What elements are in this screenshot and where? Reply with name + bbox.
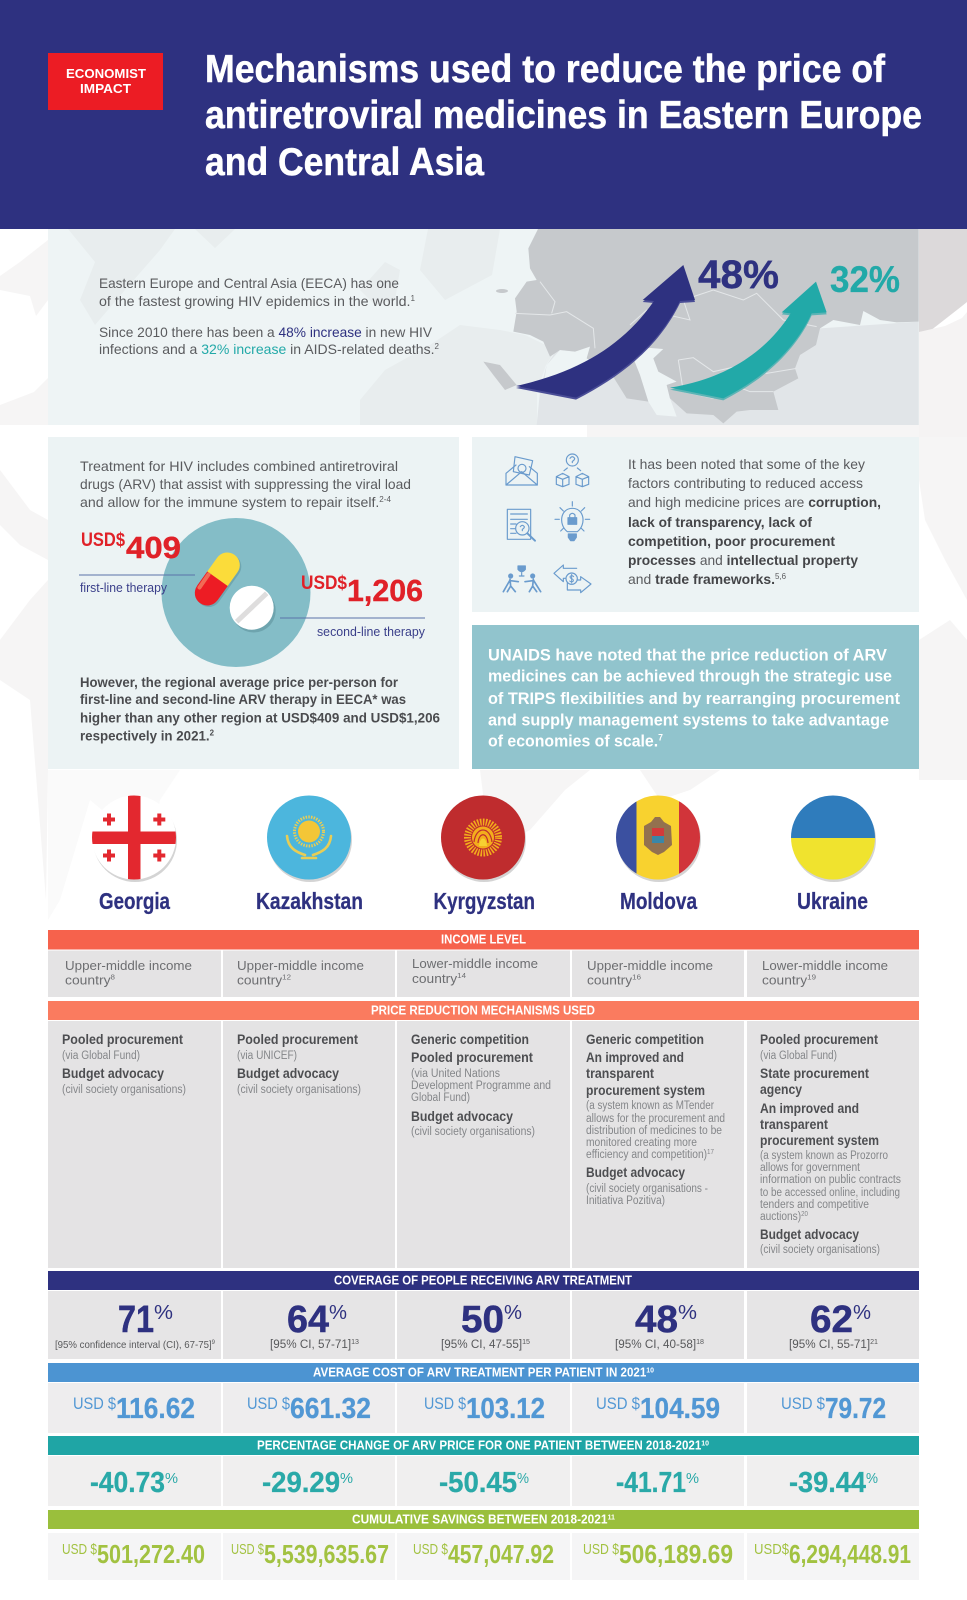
- cost values: 104.59: [640, 1393, 720, 1425]
- icon: price exchange arrows: [554, 565, 591, 593]
- coverage values: %: [504, 1302, 522, 1324]
- mechanisms: Kazakhstan: Pooled procurement: [237, 1032, 358, 1047]
- treatment text: [80, 458, 411, 510]
- confidence intervals: 21: [870, 1339, 878, 1346]
- regional price text: respectively in 2021.: [80, 728, 211, 744]
- logo: Economist Impact: ECONOMIST: [66, 66, 146, 81]
- intro text: infections and a 32% increase in AIDS-related deaths.: [99, 341, 434, 357]
- savings values: USD $: [62, 1541, 98, 1558]
- treatment text: 2-4: [379, 495, 392, 504]
- intro text: of the fastest growing HIV epidemics in the world.: [99, 293, 406, 309]
- coverage values: 64: [287, 1299, 329, 1341]
- panel: UNAIDS callout: medicines can be achieved through the strategic use: [488, 668, 892, 686]
- key factors text: and trade frameworks.: [628, 571, 776, 587]
- mechanisms: Kazakhstan: [237, 1032, 361, 1096]
- title: Mechanisms used to reduce the price of: [205, 48, 886, 91]
- price: first-line therapy: [79, 530, 195, 595]
- mechanisms: Kyrgyzstan: (civil society organisations): [411, 1126, 535, 1138]
- section: ARV treatment coverage: [48, 1271, 919, 1359]
- mechanisms: Ukraine: (via Global Fund): [760, 1050, 837, 1062]
- mechanisms: Ukraine: State procurement: [760, 1066, 869, 1081]
- section: price reduction mechanisms: PRICE REDUCTION MECHANISMS USED: [371, 1004, 595, 1018]
- header band: [0, 0, 967, 229]
- mechanisms: Ukraine: agency: [760, 1082, 802, 1097]
- mechanisms: Moldova: Initiativa Pozitiva): [586, 1195, 665, 1207]
- icon: two people with trophy: [503, 566, 541, 592]
- section: percentage change: PERCENTAGE CHANGE OF ARV PRICE FOR ONE PATIENT BETWEEN 2018-2021: [257, 1438, 737, 1452]
- icon: lightbulb with padlock: [555, 502, 590, 541]
- percentage values: -50.45: [439, 1467, 517, 1499]
- cost values: 79.72: [825, 1393, 886, 1425]
- treatment text: Treatment for HIV includes combined antiretroviral: [80, 458, 398, 474]
- key factors text: factors contributing to reduced access: [628, 475, 863, 491]
- section: percentage change: 10: [701, 1438, 709, 1448]
- mechanisms: Kazakhstan: Budget advocacy: [237, 1066, 339, 1081]
- mechanisms: Georgia: [62, 1032, 186, 1096]
- coverage values: 71: [118, 1299, 154, 1341]
- confidence intervals: [95% CI, 57-71]: [270, 1339, 350, 1351]
- regional price text: first-line and second-line ARV therapy in EECA* was: [80, 692, 406, 707]
- coverage values: %: [853, 1302, 871, 1324]
- logo: Economist Impact: IMPACT: [80, 81, 131, 96]
- price: second-line therapy: second-line therapy: [317, 625, 426, 639]
- flag: Ukraine: [791, 795, 876, 882]
- mechanisms: Ukraine: transparent: [760, 1117, 828, 1132]
- mechanisms: Moldova: Generic competition: [586, 1032, 704, 1047]
- mechanisms: Kyrgyzstan: Development Programme and: [411, 1080, 551, 1092]
- section: price reduction mechanisms: [48, 1001, 919, 1268]
- mechanisms: Georgia: Pooled procurement: [62, 1032, 183, 1047]
- coverage values: 48: [635, 1299, 678, 1341]
- icon: envelope with money: [506, 457, 537, 485]
- section: average cost: [48, 1363, 919, 1433]
- flag: Georgia: [92, 795, 177, 882]
- pills illustration: [162, 518, 310, 667]
- mechanisms: Georgia: (via Global Fund): [62, 1050, 140, 1062]
- confidence intervals: 15: [522, 1339, 530, 1346]
- mechanisms: Ukraine: allows for government: [760, 1162, 861, 1174]
- price: first-line therapy: USD$: [81, 530, 125, 551]
- mechanisms: Georgia: Budget advocacy: [62, 1066, 164, 1081]
- panel: key factors: [472, 437, 919, 612]
- key factors text: lack of transparency, lack of: [628, 514, 812, 530]
- section: income level: Lower-middle income: [762, 958, 888, 973]
- arrow: 32% increase: [670, 282, 827, 400]
- savings values: 5,539,635.67: [264, 1539, 389, 1569]
- mechanisms: Georgia: (civil society organisations): [62, 1084, 186, 1096]
- panel: UNAIDS callout: [472, 625, 919, 769]
- savings values: USD$: [754, 1541, 790, 1558]
- section: income level: INCOME LEVEL: [441, 932, 526, 946]
- mechanisms: Ukraine: (civil society organisations): [760, 1244, 880, 1256]
- cost values: 661.32: [290, 1393, 371, 1425]
- percentage values: %: [866, 1470, 878, 1487]
- section: cumulative savings: 11: [607, 1512, 615, 1522]
- cost values: USD $: [781, 1394, 825, 1413]
- mechanisms: Moldova: allows for the procurement and: [586, 1113, 725, 1125]
- flag: Kazakhstan: [267, 796, 352, 882]
- confidence intervals: [95% CI, 55-71]: [789, 1339, 869, 1351]
- intro text: Since 2010 there has been a 48% increase in new HIV: [99, 324, 433, 340]
- section: income level: Upper-middle income: [587, 958, 713, 973]
- section: income level: Upper-middle income: [237, 958, 364, 973]
- mechanisms: Moldova: (a system known as MTender: [586, 1100, 714, 1112]
- percentage values: %: [517, 1470, 529, 1487]
- regional price text: However, the regional average price per-person for: [80, 675, 399, 690]
- key factors text: competition, poor procurement: [628, 533, 835, 549]
- country names: Georgia: [99, 888, 170, 914]
- mechanisms: Kazakhstan: (civil society organisations): [237, 1084, 361, 1096]
- mechanisms: Ukraine: information on public contracts: [760, 1174, 901, 1186]
- section: income level: 8: [111, 972, 115, 982]
- savings values: 506,189.69: [619, 1539, 733, 1569]
- mechanisms: Moldova: distribution of medicines to be: [586, 1125, 722, 1137]
- section: cumulative savings: CUMULATIVE SAVINGS BETWEEN 2018-2021: [352, 1512, 621, 1526]
- section: income level: 14: [457, 971, 466, 980]
- coverage values: %: [154, 1302, 173, 1324]
- cost values: USD $: [73, 1394, 116, 1413]
- country names: Kazakhstan: [256, 888, 363, 914]
- confidence intervals: [95% CI, 40-58]: [615, 1339, 695, 1351]
- mechanisms: Moldova: 17: [707, 1149, 714, 1156]
- cost values: USD $: [424, 1394, 466, 1413]
- title: and Central Asia: [205, 141, 484, 184]
- mechanisms: Ukraine: Pooled procurement: [760, 1032, 878, 1047]
- mechanisms: Ukraine: (a system known as Prozorro: [760, 1150, 888, 1162]
- section: income level: 16: [632, 972, 641, 982]
- icon: question and boxes: [556, 454, 589, 487]
- savings values: 501,272.40: [97, 1539, 205, 1569]
- section: income level: 12: [282, 972, 291, 982]
- percentage values: %: [340, 1470, 353, 1487]
- section: income level: country: [762, 972, 805, 988]
- percentage values: -29.29: [262, 1467, 340, 1499]
- section: income level: Upper-middle income: [65, 958, 192, 973]
- confidence intervals: [95% confidence interval (CI), 67-75]: [55, 1339, 225, 1351]
- cost values: USD $: [247, 1394, 290, 1413]
- percentage values: %: [686, 1470, 699, 1487]
- cost values: USD $: [596, 1394, 640, 1413]
- section: income level: country: [65, 972, 108, 988]
- percentage values: -40.73: [90, 1467, 165, 1499]
- logo: Economist Impact: [48, 53, 163, 110]
- mechanisms: Ukraine: procurement system: [760, 1133, 879, 1148]
- country names: Ukraine: [797, 888, 868, 914]
- title: antiretroviral medicines in Eastern Europe: [205, 94, 922, 137]
- savings values: USD $: [583, 1541, 620, 1558]
- icon: tablet: [230, 586, 276, 632]
- panel: UNAIDS callout: UNAIDS have noted that the price reduction of ARV: [488, 647, 887, 665]
- section: ARV treatment coverage: COVERAGE OF PEOPLE RECEIVING ARV TREATMENT: [334, 1274, 632, 1288]
- country names: Moldova: [620, 888, 697, 914]
- mechanisms: Moldova: efficiency and competition): [586, 1149, 722, 1161]
- mechanisms: Moldova: procurement system: [586, 1083, 705, 1098]
- coverage values: 62: [810, 1299, 853, 1341]
- section: income level: Lower-middle income: [412, 956, 538, 971]
- faint world map background: [0, 229, 967, 920]
- coverage values: %: [678, 1302, 697, 1324]
- key factors text: It has been noted that some of the key: [628, 456, 865, 472]
- mechanisms: Kyrgyzstan: Pooled procurement: [411, 1050, 533, 1065]
- panel: UNAIDS callout: and supply management systems to take advantage: [488, 712, 889, 730]
- price: second-line therapy: [280, 573, 426, 639]
- mechanisms: Ukraine: auctions): [760, 1211, 807, 1223]
- cost values: 103.12: [466, 1393, 545, 1425]
- mechanisms: Kyrgyzstan: [411, 1032, 551, 1138]
- mechanisms: Kyrgyzstan: Global Fund): [411, 1092, 470, 1104]
- panel: UNAIDS callout: of economies of scale.: [488, 733, 665, 751]
- section: average cost: 10: [646, 1366, 654, 1374]
- price: first-line therapy: 409: [126, 530, 181, 565]
- section: income level: [48, 930, 919, 997]
- price: second-line therapy: USD$: [301, 573, 347, 594]
- percentage values: -41.71: [616, 1467, 686, 1499]
- mechanisms: Ukraine: [760, 1032, 901, 1256]
- mechanisms: Kazakhstan: (via UNICEF): [237, 1050, 297, 1062]
- section: income level: country: [237, 972, 280, 988]
- section: income level: country: [587, 972, 630, 988]
- treatment text: and allow for the immune system to repair itself.: [80, 494, 376, 510]
- percentage values: [90, 1467, 878, 1499]
- stat: 32%: 32%: [830, 259, 900, 300]
- mechanisms: Ukraine: 20: [801, 1211, 808, 1218]
- key factors text: and high medicine prices are corruption,: [628, 494, 881, 510]
- cost values: 116.62: [116, 1393, 195, 1425]
- coverage values: %: [329, 1302, 347, 1324]
- section: cumulative savings: [48, 1510, 919, 1580]
- section: income level: 19: [807, 972, 816, 982]
- mechanisms: Moldova: [586, 1032, 725, 1207]
- intro text: 2: [435, 342, 440, 351]
- confidence intervals: 9: [212, 1339, 215, 1346]
- savings values: USD $: [231, 1541, 264, 1558]
- panel: UNAIDS callout: of TRIPS flexibilities and by rearranging procurement: [488, 690, 900, 708]
- regional price text: higher than any other region at USD$409 and USD$1,206: [80, 710, 440, 726]
- mechanisms: Kyrgyzstan: Generic competition: [411, 1032, 529, 1047]
- section: average cost: AVERAGE COST OF ARV TREATMENT PER PATIENT IN 2021: [313, 1366, 673, 1380]
- panel: treatment and pricing: [48, 437, 459, 769]
- savings values: USD $: [413, 1541, 449, 1558]
- panel: regional increase map: [48, 225, 919, 425]
- section: percentage change: [48, 1436, 919, 1506]
- confidence intervals: 13: [351, 1339, 359, 1346]
- confidence intervals: [95% CI, 47-55]: [441, 1339, 521, 1351]
- mechanisms: Ukraine: An improved and: [760, 1101, 859, 1116]
- price: second-line therapy: 1,206: [347, 573, 423, 608]
- intro text: [99, 275, 440, 357]
- flag: Moldova: [616, 795, 701, 882]
- icons: corruption, transparency, competition: [503, 454, 591, 593]
- savings values: 6,294,448.91: [789, 1539, 911, 1569]
- country names: Kyrgyzstan: [434, 888, 535, 914]
- mechanisms: Ukraine: tenders and competitive: [760, 1199, 869, 1211]
- panel: UNAIDS callout: 7: [658, 733, 663, 743]
- icon: document and magnifier: [507, 509, 535, 541]
- mechanisms: Moldova: (civil society organisations -: [586, 1183, 708, 1195]
- mechanisms: Kyrgyzstan: Budget advocacy: [411, 1109, 513, 1124]
- country names: [99, 888, 868, 914]
- coverage values: 50: [461, 1299, 504, 1341]
- mechanisms: Ukraine: Budget advocacy: [760, 1227, 859, 1242]
- key factors text: processes and intellectual property: [628, 552, 858, 568]
- mechanisms: Moldova: monitored creating more: [586, 1137, 697, 1149]
- price: first-line therapy: first-line therapy: [80, 581, 168, 595]
- treatment text: drugs (ARV) that assist with suppressing the viral load: [80, 476, 411, 492]
- intro text: 1: [410, 294, 416, 303]
- regional price text: [80, 675, 440, 744]
- mechanisms: Moldova: An improved and: [586, 1050, 684, 1065]
- confidence intervals: [55, 1339, 878, 1351]
- mechanisms: Kyrgyzstan: (via United Nations: [411, 1068, 500, 1080]
- percentage values: %: [165, 1470, 178, 1487]
- title: [205, 48, 922, 184]
- key factors text: 5,6: [775, 572, 787, 581]
- cost values: [73, 1393, 886, 1425]
- intro text: Eastern Europe and Central Asia (EECA) has one: [99, 275, 399, 291]
- key factors text: [628, 456, 881, 587]
- coverage values: [118, 1299, 871, 1341]
- stat: 48%: 48%: [698, 253, 779, 297]
- arrow: 48% increase: [516, 265, 695, 400]
- mechanisms: Moldova: transparent: [586, 1066, 654, 1081]
- icon: capsule: [200, 565, 229, 594]
- percentage values: -39.44: [789, 1467, 866, 1499]
- map of Eastern Europe and Central Asia: [483, 229, 919, 425]
- mechanisms: Moldova: Budget advocacy: [586, 1165, 685, 1180]
- regional price text: 2: [210, 728, 215, 738]
- mechanisms: Ukraine: to be accessed online, including: [760, 1187, 900, 1199]
- section: income level: country: [412, 971, 455, 986]
- savings values: [62, 1539, 911, 1569]
- confidence intervals: 18: [696, 1339, 704, 1346]
- flag: Kyrgyzstan: [441, 796, 526, 882]
- savings values: 457,047.92: [448, 1539, 554, 1569]
